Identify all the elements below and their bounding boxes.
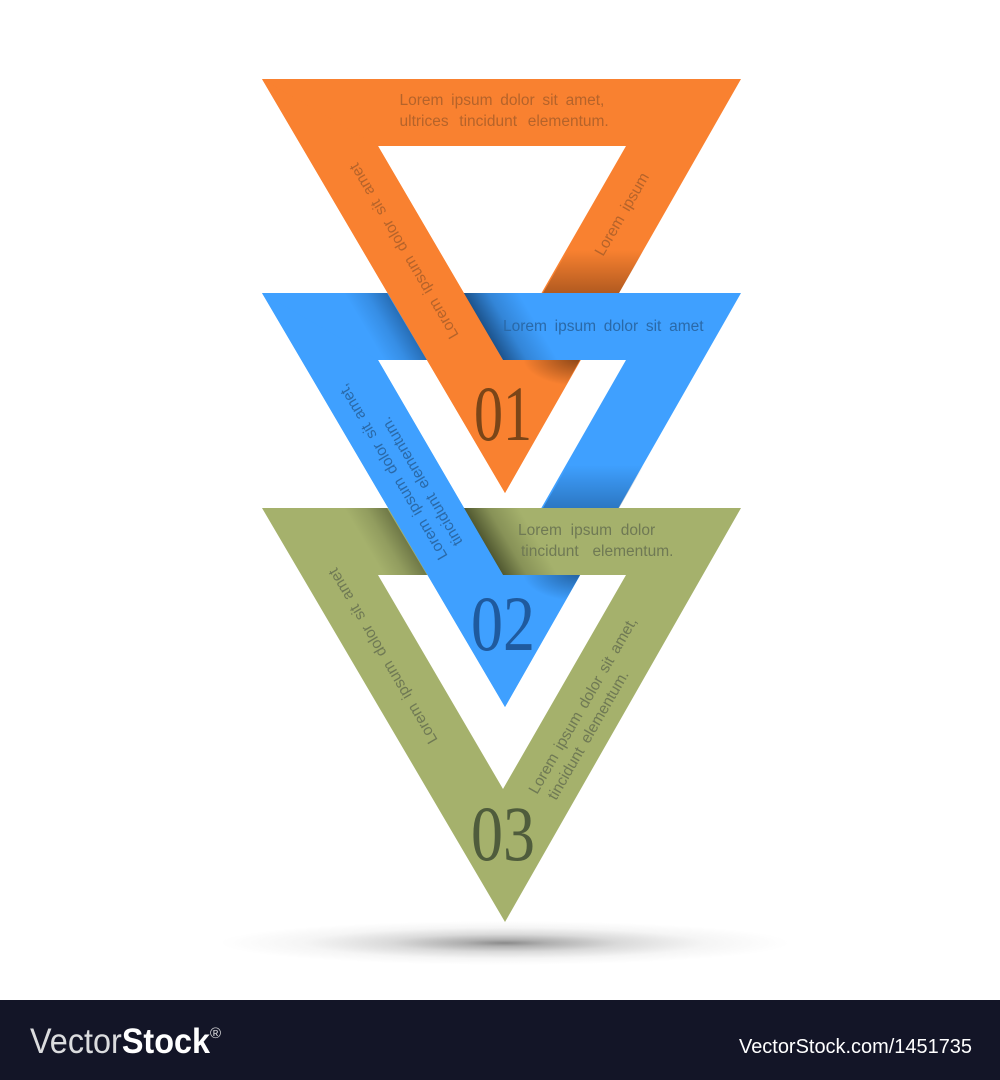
number 03: 03 [471, 790, 535, 877]
orange left arm text: Lorem ipsum dolor sit amet [346, 159, 462, 342]
registered mark: ® [210, 1025, 221, 1042]
number 02: 02 [471, 580, 535, 667]
blue left arm text: Lorem ipsum dolor sit amet, [335, 381, 451, 563]
number 01: 01 [474, 370, 532, 457]
orange top text: ultrices tincidunt elementum. [400, 113, 609, 130]
orange top text [400, 92, 609, 130]
green top text [518, 522, 673, 560]
orange right arm text: Lorem ipsum [592, 170, 653, 259]
footer image id: VectorStock.com/1451735 [739, 1036, 972, 1058]
green right arm text: tincidunt elementum. [545, 668, 633, 803]
orange top text: Lorem ipsum dolor sit amet, [400, 92, 604, 109]
blue top text: Lorem ipsum dolor sit amet [503, 318, 704, 335]
blue ribbon front arm and tip [262, 293, 580, 707]
green right arm text: Lorem ipsum dolor sit amet, [526, 615, 641, 797]
green top text: Lorem ipsum dolor [518, 522, 655, 539]
green left arm text: Lorem ipsum dolor sit amet [325, 564, 441, 747]
footer logo: VectorStock [30, 1022, 210, 1061]
orange ribbon front arm and tip [262, 79, 580, 493]
orange ribbon triangle [262, 79, 741, 493]
footer bar [0, 1000, 1000, 1080]
blue left arm text: tincidunt elementum. [378, 414, 466, 549]
blue ribbon triangle [262, 293, 741, 707]
green ribbon triangle [262, 508, 741, 922]
ground shadow [220, 921, 790, 965]
green top text: tincidunt elementum. [521, 543, 673, 560]
